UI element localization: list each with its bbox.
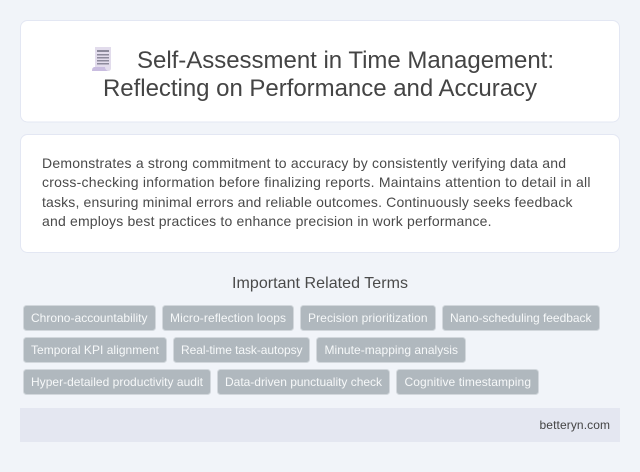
tag: Hyper-detailed productivity audit xyxy=(24,370,210,394)
tag: Data-driven punctuality check: Data-driven punctuality check xyxy=(225,375,383,389)
tag: Real-time task-autopsy xyxy=(174,338,310,362)
tag: Cognitive timestamping xyxy=(396,370,538,394)
description text: tasks, ensuring minimal errors and reliable outcomes. Continuously seeks feedback xyxy=(42,194,574,210)
panel: title header xyxy=(20,20,620,122)
tag: Minute-mapping analysis: Minute-mapping analysis xyxy=(324,343,458,357)
tag: Chrono-accountability xyxy=(24,306,156,330)
panel: description xyxy=(20,134,620,252)
description text: cross-checking information before finalizing reports. Maintains attention to detail in all xyxy=(42,174,590,190)
tag: Real-time task-autopsy: Real-time task-autopsy xyxy=(181,343,302,357)
title: Reflecting on Performance and Accuracy xyxy=(103,75,537,102)
tag: Nano-scheduling feedback xyxy=(442,306,600,330)
tag: Temporal KPI alignment: Temporal KPI alignment xyxy=(31,343,160,357)
heading: related terms: Important Related Terms xyxy=(232,275,408,292)
tag group xyxy=(24,306,600,394)
tag: Nano-scheduling feedback: Nano-scheduling feedback xyxy=(450,311,592,325)
tag: Precision prioritization xyxy=(300,306,436,330)
footer source text: betteryn.com xyxy=(540,418,610,432)
tag: Temporal KPI alignment xyxy=(24,338,166,362)
tag: Chrono-accountability: Chrono-accountability xyxy=(31,311,148,325)
description text: and employs best practices to enhance precision in work performance. xyxy=(42,213,492,229)
tag: Hyper-detailed productivity audit: Hyper-detailed productivity audit xyxy=(31,375,204,389)
tag: Micro-reflection loops xyxy=(162,306,294,330)
icon: scroll document xyxy=(92,47,111,71)
description text: Demonstrates a strong commitment to accuracy by consistently verifying data and xyxy=(42,155,566,171)
tag: Cognitive timestamping: Cognitive timestamping xyxy=(404,375,531,389)
tag: Minute-mapping analysis xyxy=(316,338,466,362)
footer bar xyxy=(20,408,620,442)
title xyxy=(103,47,554,102)
title: Self-Assessment in Time Management: xyxy=(137,47,554,74)
tag: Data-driven punctuality check xyxy=(218,370,390,394)
tag: Micro-reflection loops: Micro-reflection loops xyxy=(170,311,286,325)
tag: Precision prioritization: Precision prioritization xyxy=(308,311,428,325)
description text xyxy=(42,155,590,229)
